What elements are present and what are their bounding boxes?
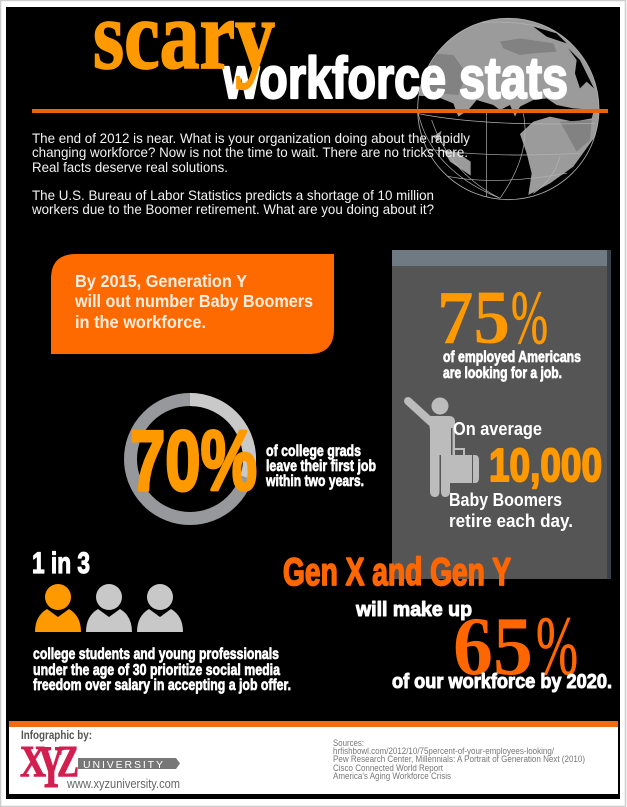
- stat: 65%: %: [536, 600, 578, 693]
- text: college grads: within two years.: [265, 473, 364, 490]
- logo: XYZ University: UNIVERSITY: [83, 759, 163, 771]
- text: sources: Cisco Connected World Report: [333, 763, 443, 773]
- stat: 1 in 3: 1 in 3: [32, 547, 90, 580]
- text: social media freedom: college students and young professionals: [33, 646, 279, 663]
- intro text: workers due to the Boomer retirement. What are you doing about it?: [31, 201, 434, 217]
- logo: XYZ University: X: [20, 737, 46, 786]
- text: employed Americans: are looking for a job.: [443, 365, 562, 382]
- text: sources: Sources:: [333, 738, 364, 748]
- text: infographic by: Infographic by:: [21, 728, 92, 742]
- panel: generation Y callout: will out number Baby Boomers: [74, 291, 313, 311]
- text: employed Americans: [443, 349, 581, 382]
- panel: generation Y callout: in the workforce.: [75, 312, 206, 332]
- text: employed Americans: of employed Americans: [443, 349, 581, 366]
- text: social media freedom: freedom over salary in accepting a job offer.: [33, 677, 291, 694]
- icon: person with suitcase: [408, 398, 479, 497]
- icon: globe: [417, 18, 600, 200]
- logo: XYZ University: [20, 734, 180, 800]
- intro text: changing workforce? Now is not the time to wait. There are no tricks here.: [32, 144, 468, 160]
- text: baby boomers retire: Baby Boomers: [449, 489, 562, 510]
- intro text: The U.S. Bureau of Labor Statistics predicts a shortage of 10 million: [32, 187, 434, 203]
- text: sources: America's Aging Workforce Crisis: [333, 771, 451, 781]
- intro text: The end of 2012 is near. What is your organization doing about the rapidly: [32, 130, 470, 146]
- text: website: www.xyzuniversity.com: [66, 776, 180, 791]
- logo: XYZ University: Z: [57, 737, 79, 786]
- text: baby boomers retire: [449, 489, 573, 531]
- text: baby boomers retire: retire each day.: [449, 510, 573, 531]
- stat: 65%: [453, 600, 578, 693]
- text: social media freedom: under the age of 30 prioritize social media: [33, 662, 280, 679]
- stat: 75%: 75: [437, 276, 510, 360]
- stat: 65%: 65: [453, 600, 533, 693]
- stat: 70%: 70%: [130, 414, 257, 509]
- chart: 70% ring: [130, 400, 257, 518]
- panel: generation Y callout: [51, 254, 334, 354]
- stat: 10,000: 10,000: [489, 439, 602, 491]
- header rule: [32, 109, 608, 113]
- intro text: Real facts deserve real solutions.: [32, 159, 228, 175]
- panel: generation Y callout: By 2015, Generation Y: [75, 271, 247, 291]
- icon: three people: [35, 584, 183, 632]
- logo: XYZ University: Y: [38, 734, 64, 800]
- text: will make up: will make up: [355, 599, 472, 621]
- text: sources: [333, 738, 585, 781]
- stat: 75%: [437, 276, 548, 360]
- heading: Gen X and Gen Y: Gen X and Gen Y: [283, 551, 511, 594]
- text: college grads: of college grads: [266, 443, 361, 460]
- stat: 75%: %: [511, 276, 548, 360]
- text: college grads: [265, 443, 376, 490]
- panel: footer: [9, 721, 618, 800]
- text: sources: Pew Research Center, Millennials: A Portrait of Generation Next (2010): [333, 754, 585, 764]
- panel: gray stats: [392, 250, 611, 579]
- intro text: [31, 130, 470, 217]
- text: social media freedom: [33, 646, 291, 694]
- text: college grads: leave their first job: [266, 458, 376, 475]
- text: sources: hrfishbowl.com/2012/10/75percent-of-your-employees-looking/: [333, 746, 554, 756]
- text: on average: On average: [453, 418, 542, 439]
